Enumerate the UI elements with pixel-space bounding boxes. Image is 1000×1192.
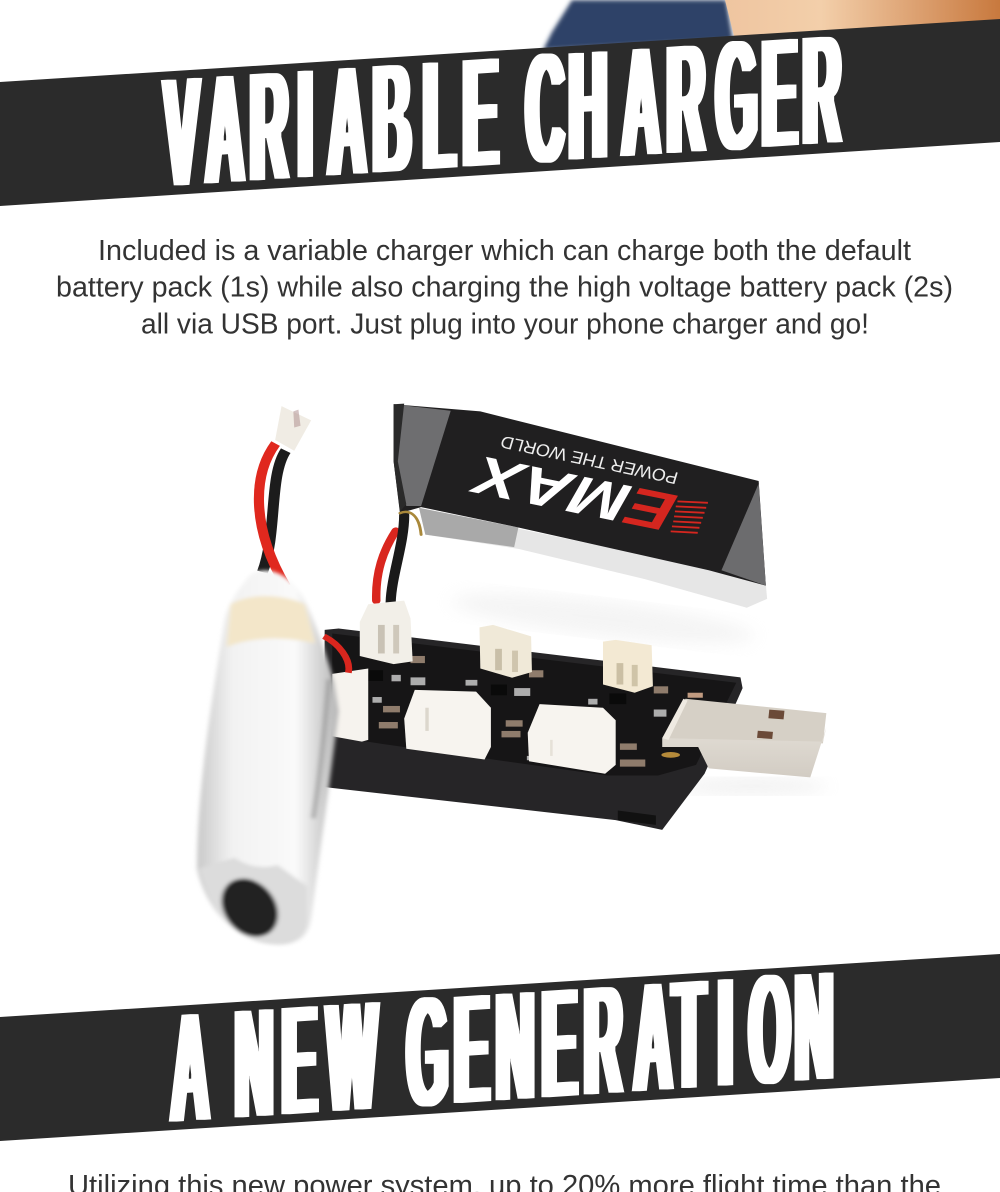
top row connectors xyxy=(360,601,653,693)
charger base xyxy=(324,628,743,830)
description text: Included is a variable charger which can charge both the default xyxy=(98,235,911,267)
icon: top battery xyxy=(394,404,767,608)
description text: all via USB port. Just plug into your phone charger and go! xyxy=(141,308,869,340)
front battery wires and plug xyxy=(259,406,349,673)
description text xyxy=(56,235,953,340)
front battery xyxy=(197,570,339,945)
bottom row connectors xyxy=(332,668,616,774)
heading band: a new generation xyxy=(0,937,1000,1159)
photo: person at top xyxy=(543,0,1000,50)
connector 2 xyxy=(479,625,532,678)
heading band: variable charger xyxy=(0,0,1000,223)
heading text: A NEW GENERATION xyxy=(171,937,833,1159)
icon: top battery wires xyxy=(376,512,421,602)
description text: battery pack (1s) while also charging the high voltage battery pack (2s) xyxy=(56,272,953,304)
connector 3 xyxy=(603,640,653,693)
battery logo: EMAX xyxy=(464,444,682,542)
photo: charger with batteries xyxy=(197,404,827,945)
connector 1 xyxy=(360,601,413,664)
USB plug xyxy=(661,699,826,777)
heading text: VARIABLE CHARGER xyxy=(164,0,841,223)
battery logo: POWER THE WORLD xyxy=(498,432,680,488)
